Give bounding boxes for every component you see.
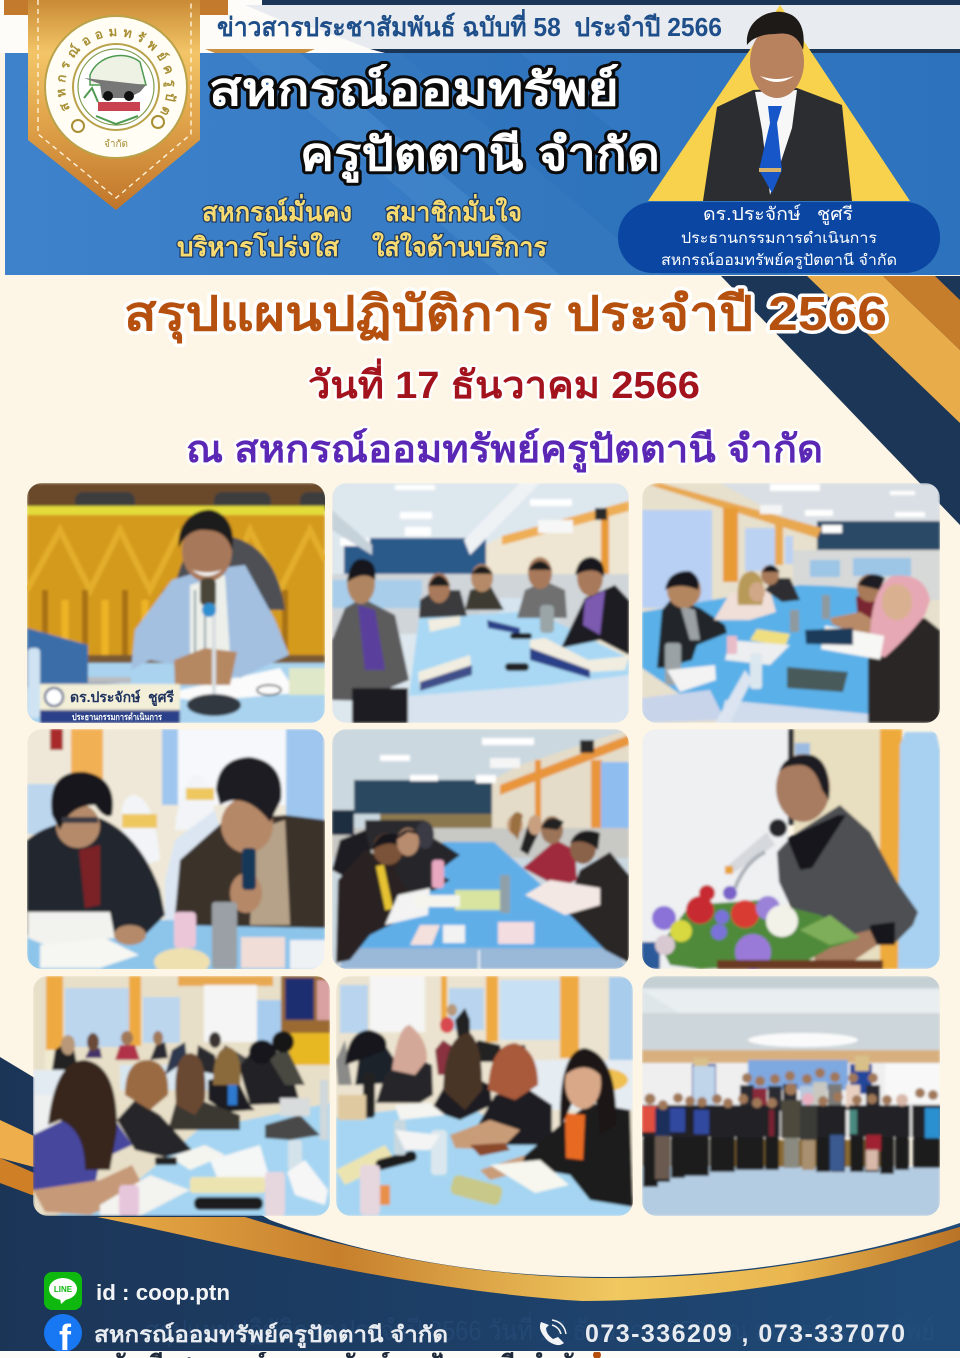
motto lines: สหกรณ์มั่นคง — [202, 193, 352, 227]
chairman portrait on yellow triangle — [648, 5, 910, 201]
back row people — [740, 1068, 880, 1113]
venue heading: ณ สหกรณ์ออมทรัพย์ครูปัตตานี จำกัด — [186, 428, 823, 473]
seal: จำกัด — [104, 139, 128, 150]
footer: phone icon — [540, 1320, 566, 1345]
photo 9: group photo on stage — [642, 976, 941, 1216]
header: blue banner — [5, 53, 960, 275]
photo 1: chairman at desk: ประธานกรรมการดำเนินการ — [72, 712, 162, 722]
footer: Facebook icon: f — [59, 1317, 72, 1358]
front row people — [642, 1083, 941, 1187]
footer: Facebook icon — [44, 1314, 82, 1358]
motto lines: ใส่ใจด้านบริการ — [372, 232, 547, 262]
cooperative name title: สหกรณ์ออมทรัพย์ — [209, 63, 619, 115]
background: top-right navy and gold stripes — [721, 276, 960, 525]
photo 8: women at table, front woman facing camera — [336, 976, 633, 1216]
motto lines: บริหารโปร่งใส — [177, 231, 339, 262]
chairman name pill: สหกรณ์ออมทรัพย์ครูปัตตานี จำกัด — [661, 252, 897, 269]
header: white top area — [0, 0, 960, 53]
bottom cut-off strip — [0, 1351, 960, 1358]
photo 7: women taking notes at table — [33, 976, 330, 1216]
footer: LINE icon: LINE — [54, 1285, 73, 1294]
date heading: วันที่ 17 ธันวาคม 2566 — [308, 358, 700, 407]
chairman name pill — [618, 202, 940, 273]
cooperative name title — [209, 63, 660, 183]
motto lines — [177, 193, 547, 262]
newsletter issue heading: ข่าวสารประชาสัมพันธ์ ฉบับที่ 58 ประจำปี 2566 — [217, 8, 722, 42]
photo 1: chairman at desk: ดร.ประจักษ์ ชูศรี — [70, 689, 175, 706]
seal — [44, 15, 188, 159]
footer: Facebook page name: สหกรณ์ออมทรัพย์ครูปัตตานี จำกัด — [94, 1322, 448, 1349]
cooperative name title: ครูปัตตานี จำกัด — [300, 128, 660, 183]
chairman name pill: ประธานกรรมการดำเนินการ — [681, 230, 877, 247]
footer: LINE id: id : coop.ptn — [96, 1280, 230, 1305]
footer: LINE icon — [44, 1272, 82, 1310]
motto lines: สมาชิกมั่นใจ — [385, 193, 522, 227]
photo 6: speaker at flower podium — [642, 729, 940, 970]
photo 3: meeting table side view — [642, 483, 940, 723]
footer: phone numbers: 073-336209 , 073-337070 — [585, 1320, 905, 1348]
photo 5: long meeting table — [332, 729, 629, 969]
background: bottom navy and gold swoosh — [0, 1057, 960, 1358]
photo 1: chairman at desk — [27, 483, 330, 723]
photo 2: five seated men — [332, 483, 629, 723]
main heading: สรุปแผนปฏิบัติการ ประจำปี 2566 — [124, 288, 887, 344]
chairman name pill: ดร.ประจักษ์ ชูศรี — [703, 204, 853, 225]
gold ribbon with cooperative seal — [4, 0, 228, 210]
photo 4: two seated people, one with microphone — [27, 729, 325, 976]
